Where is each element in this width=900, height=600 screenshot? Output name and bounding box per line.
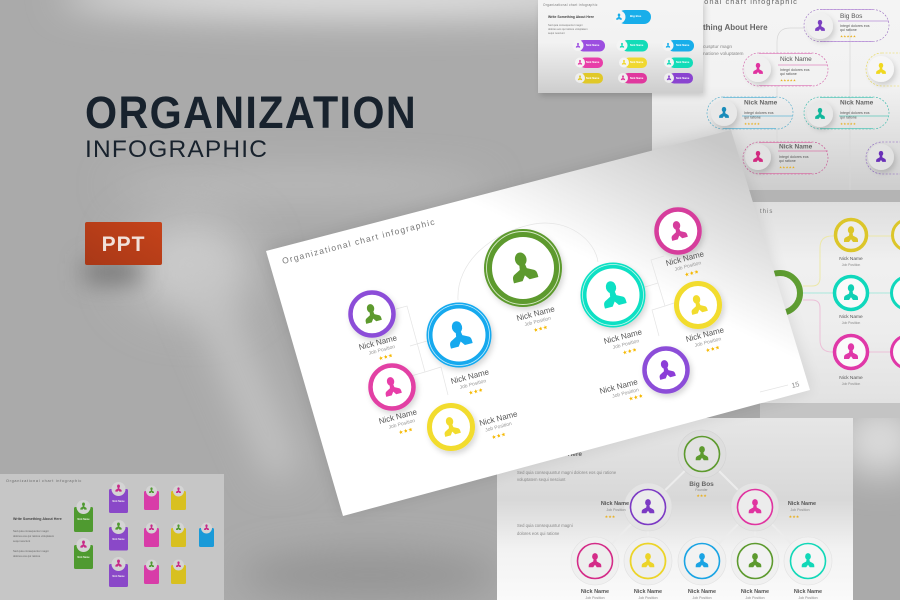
pill: row 1 teal: Nick Name	[630, 43, 644, 47]
node: blue row 3: Job Position	[692, 596, 712, 600]
label: teal: Nick Name	[603, 327, 643, 346]
node: yellow	[836, 220, 866, 267]
heading: small slide title: Organizational chart infographic	[543, 3, 598, 7]
card: purple 3: Nick Name	[112, 575, 125, 578]
text block: sequi nesciunt	[548, 31, 565, 35]
panel: top small slide	[538, 0, 703, 93]
pill: big: Big Bos	[630, 14, 642, 18]
node: teal	[834, 276, 868, 325]
label: blue: ★★★	[468, 386, 484, 397]
node: yellow: Job Position	[842, 263, 860, 267]
card: pink: ★★★★★	[780, 78, 797, 82]
pill: row 3 yellow	[575, 73, 603, 84]
label: magenta top	[665, 249, 709, 282]
card: pink: Nick Name	[780, 56, 812, 63]
panel: bottom left slide	[0, 474, 224, 600]
pill: row 1 blue: Nick Name	[676, 43, 690, 47]
subtitle: INFOGRAPHIC	[85, 136, 267, 163]
text block: Sed quia consequuntur magni	[517, 523, 573, 528]
node: pink: Job Position	[842, 382, 860, 386]
node: purple: Nick Name	[601, 501, 629, 507]
card: Big Bos: Integri dolores eos	[840, 24, 870, 28]
label: purple left: Job Position	[368, 344, 396, 357]
heading: write something: Write Something About Here	[13, 517, 62, 521]
text block: dolores eos qui ratione	[13, 554, 41, 558]
pill: row 1 blue	[662, 40, 694, 52]
label: purple right	[599, 377, 644, 409]
card: teal: qui ratione	[840, 116, 857, 120]
text block: Sed quia consequuntur magni	[13, 529, 49, 533]
node: blue row 3: Nick Name	[688, 589, 716, 595]
card: crimson: ★★★★★	[779, 166, 796, 170]
heading: small write something: Write Something About Here	[548, 15, 594, 19]
label: green big: Job Position	[524, 316, 552, 328]
label: pink left: ★★★	[398, 426, 414, 436]
card: pink: Integri dolores eos	[780, 68, 810, 72]
node: yellow row 3: Nick Name	[634, 589, 662, 595]
card: Big Bos	[804, 10, 889, 42]
card: Big Bos: Big Bos	[840, 13, 863, 20]
label: green big: ★★★	[533, 324, 549, 334]
card: blue: qui ratione	[744, 116, 761, 120]
card: crimson	[743, 142, 828, 174]
node: teal: Job Position	[842, 321, 860, 325]
label: pink left: Job Position	[388, 418, 416, 431]
label: yellow right: Job Position	[694, 336, 722, 349]
panel: bottom right slide	[497, 418, 853, 600]
pill: row 3 magenta: Nick Name	[630, 76, 644, 80]
pill: big	[612, 10, 651, 24]
pill: row 1 purple: Nick Name	[586, 43, 600, 47]
label: yellow bottom: Job Position	[485, 421, 513, 434]
pill: row 3 yellow: Nick Name	[586, 76, 600, 80]
node: teal row 3: Job Position	[798, 596, 818, 600]
card: pink	[743, 53, 828, 86]
text block: Sed quia consequuntur magni	[548, 23, 583, 27]
label: green big: Nick Name	[516, 304, 556, 323]
node: teal row 3	[784, 537, 832, 600]
pill: row 2 yellow	[619, 58, 647, 68]
text block	[517, 470, 617, 536]
node: yellow row 3: Job Position	[638, 596, 658, 600]
node: purple right	[644, 348, 688, 392]
card: magenta 3	[144, 560, 159, 584]
pill: row 3 purple: Nick Name	[676, 76, 690, 80]
text block: natione voluptatem	[703, 51, 744, 57]
node: yellow: Nick Name	[839, 256, 863, 262]
text block: Sed quia consequuntur magni	[13, 549, 49, 553]
card: blue: Nick Name	[744, 100, 778, 106]
node: green row 3: Nick Name	[741, 589, 769, 595]
card: crimson: Integri dolores eos	[779, 155, 809, 159]
pill: row 2 teal: Nick Name	[676, 60, 690, 64]
card: blue	[707, 97, 793, 129]
label: green big	[516, 304, 560, 337]
card: teal: Nick Name	[840, 100, 874, 106]
label: yellow bottom: Nick Name	[478, 409, 519, 428]
card: pink: qui ratione	[780, 72, 797, 76]
text block: sequi nesciunt	[13, 539, 30, 543]
node: purple: Job Position	[606, 508, 626, 512]
node: purple: ★★★	[605, 514, 616, 519]
label: purple left: Nick Name	[358, 333, 398, 352]
label: purple left: ★★★	[378, 352, 394, 362]
node: green row 3	[731, 537, 779, 600]
node: Big Bos: ★★★	[696, 494, 707, 498]
card: Big Bos: qui ratione	[840, 28, 857, 32]
heading: about here: About Here	[547, 451, 582, 458]
label: purple right: ★★★	[628, 392, 644, 403]
label: purple left	[358, 333, 402, 366]
pill: row 2 yellow: Nick Name	[630, 60, 644, 64]
label: yellow bottom: ★★★	[491, 431, 507, 441]
card: yellow	[866, 53, 900, 86]
label: magenta top: Nick Name	[665, 249, 705, 268]
card: blue	[199, 522, 214, 547]
label: teal: Job Position	[612, 338, 640, 351]
text block	[548, 23, 588, 35]
pill: row 1 purple	[572, 40, 605, 52]
pill: row 2 teal	[664, 58, 693, 68]
node: Big Bos	[678, 430, 726, 498]
pill: row 3 magenta	[618, 73, 647, 84]
node: Big Bos: Big Bos	[689, 481, 714, 488]
node: yellow bottom	[430, 406, 472, 448]
node: pink	[834, 336, 868, 386]
card: yellow 1	[171, 486, 186, 510]
card: crimson: qui ratione	[779, 159, 796, 163]
node: pink	[731, 483, 816, 531]
card: green 2	[74, 538, 93, 569]
node: yellow right	[676, 284, 720, 326]
label: pink left	[378, 407, 422, 440]
pill: row 2 magenta: Nick Name	[586, 60, 600, 64]
node: purple	[601, 483, 672, 531]
label: pink left: Nick Name	[378, 407, 418, 426]
node: green row 3: Job Position	[745, 596, 765, 600]
node: pink: Nick Name	[788, 501, 816, 507]
label: yellow right	[685, 325, 729, 358]
panel: right middle slide	[652, 202, 900, 403]
title: ORGANIZATION	[85, 87, 417, 138]
text block: dolores eos qui ratione	[517, 531, 560, 536]
card: purple 3	[109, 557, 128, 587]
node: crimson row 3: Job Position	[585, 596, 605, 600]
node: blue row 3	[678, 537, 726, 600]
card: green 1: Nick Name	[77, 518, 90, 521]
card: magenta 1	[144, 486, 159, 510]
text block: voluptatem sequi nesciunt	[517, 477, 566, 482]
label: blue: Job Position	[459, 378, 487, 391]
node: Big Bos: Founder	[695, 488, 709, 492]
node: pink left	[370, 366, 414, 408]
text block: Sed quia consequuntur magni dolores eos qui ratione	[517, 470, 617, 475]
node: crimson row 3: Nick Name	[581, 589, 609, 595]
card: purple 2: Nick Name	[112, 538, 125, 541]
text block	[13, 529, 55, 558]
label: blue	[450, 367, 494, 400]
label: yellow right: ★★★	[705, 344, 721, 354]
label: purple right: Job Position	[612, 387, 640, 400]
label: teal	[603, 327, 647, 360]
card: blue: Integri dolores eos	[744, 111, 774, 115]
card: Big Bos: ★★★★★	[840, 34, 857, 38]
label: yellow right: Nick Name	[685, 325, 725, 344]
node: pink: ★★★	[789, 514, 800, 519]
card: purple 1	[109, 482, 128, 513]
node: magenta top	[656, 210, 700, 252]
page number	[760, 381, 800, 392]
pill: row 1 teal	[616, 40, 648, 52]
text block: cusptur magn	[703, 44, 732, 50]
badge: PPT: PPT	[102, 233, 145, 256]
card: purple 1: Nick Name	[112, 500, 125, 503]
card: green 2: Nick Name	[77, 556, 90, 559]
connector lines	[396, 223, 674, 395]
node: crimson row 3	[571, 537, 619, 600]
node: pink: Job Position	[790, 508, 810, 512]
card: blue: ★★★★★	[744, 122, 761, 126]
card: magenta 2	[144, 522, 159, 547]
heading: write something: thing About Here	[703, 23, 768, 32]
text block: dolores eos qui ratione voluptatem	[13, 534, 55, 538]
card: crimson: Nick Name	[779, 144, 813, 150]
label: yellow bottom	[478, 409, 523, 443]
heading: slide title: Organizational chart infographic	[281, 216, 436, 266]
panel: upper right slide	[652, 0, 900, 190]
card: violet	[866, 142, 900, 174]
text block: dolores eos qui ratione voluptatem	[548, 27, 588, 31]
label: teal: ★★★	[622, 346, 638, 357]
label: purple right: Nick Name	[599, 377, 639, 396]
node: teal row 3: Nick Name	[794, 589, 822, 595]
node: yellow row 3	[624, 537, 672, 600]
card: purple 2	[109, 520, 128, 550]
heading: partial slide title: this	[760, 209, 773, 215]
heading: title: Organizational chart infographic	[6, 479, 82, 483]
label: magenta top: Job Position	[674, 260, 702, 273]
node: purple left	[350, 292, 394, 336]
node: blue	[428, 304, 490, 366]
card: yellow 3	[171, 560, 186, 584]
page number: 15	[791, 381, 800, 390]
label: blue: Nick Name	[450, 367, 490, 386]
card: teal: ★★★★★	[840, 122, 857, 126]
card: green 1	[74, 500, 93, 532]
node: green big	[486, 232, 560, 304]
badge: PPT	[85, 222, 162, 265]
node: teal: Nick Name	[839, 314, 863, 320]
node: right partial	[892, 220, 900, 368]
node: teal	[582, 264, 644, 326]
node: pink: Nick Name	[839, 375, 863, 381]
pill: row 3 purple	[664, 73, 693, 84]
card: yellow 2	[171, 522, 186, 547]
card: teal: Integri dolores eos	[840, 111, 870, 115]
node: green partially hidden	[760, 273, 800, 313]
pill: row 2 magenta	[575, 58, 603, 68]
card: teal	[804, 97, 889, 129]
label: magenta top: ★★★	[684, 268, 700, 279]
panel: main tilted slide	[266, 130, 810, 516]
